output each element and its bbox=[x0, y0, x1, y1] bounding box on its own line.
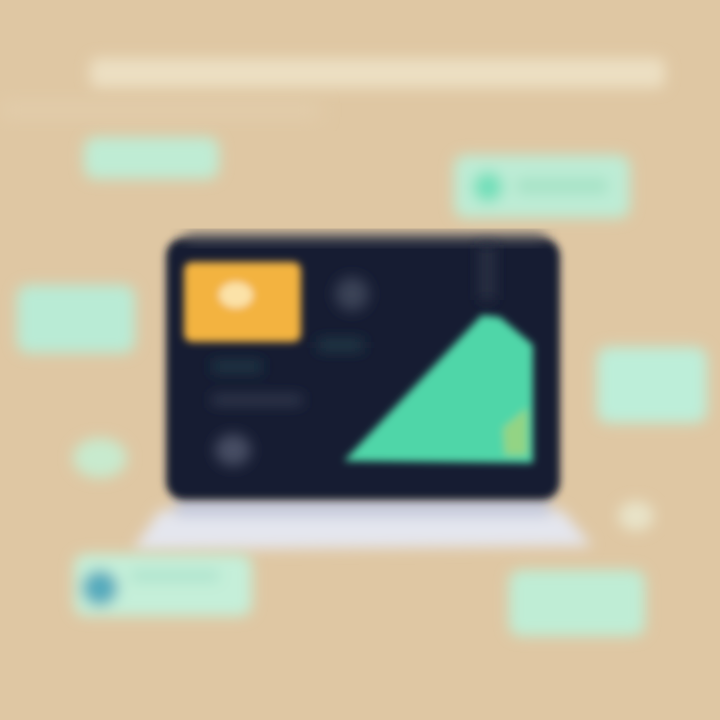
text bar: bottom left pill bbox=[130, 570, 220, 582]
laptop base bbox=[133, 498, 592, 550]
text bar: top right pill bbox=[516, 178, 608, 194]
title bar bbox=[90, 58, 665, 88]
laptop screen bbox=[166, 238, 560, 500]
icon: top right dot bbox=[473, 172, 503, 202]
pill: bottom left with icon bbox=[74, 554, 252, 616]
pill: top right with icon bbox=[454, 155, 630, 218]
chart: green triangle bbox=[344, 315, 533, 463]
icon: bottom left dot bbox=[82, 570, 118, 606]
accent: yellow-green corner bbox=[503, 408, 527, 455]
pill: small right bbox=[618, 501, 654, 531]
subtitle line bbox=[0, 102, 320, 118]
icon: card centre bbox=[219, 282, 253, 308]
card: yellow icon bbox=[184, 262, 301, 342]
pill: small left bbox=[73, 438, 127, 478]
pill: bottom right bbox=[509, 570, 645, 636]
pill: top left bbox=[84, 137, 219, 179]
base shadow bbox=[175, 498, 550, 516]
pill: right bbox=[597, 347, 707, 423]
chart: faint dashboard marks bbox=[212, 245, 494, 466]
screen top edge bbox=[185, 234, 545, 243]
pill: left bbox=[17, 285, 135, 353]
